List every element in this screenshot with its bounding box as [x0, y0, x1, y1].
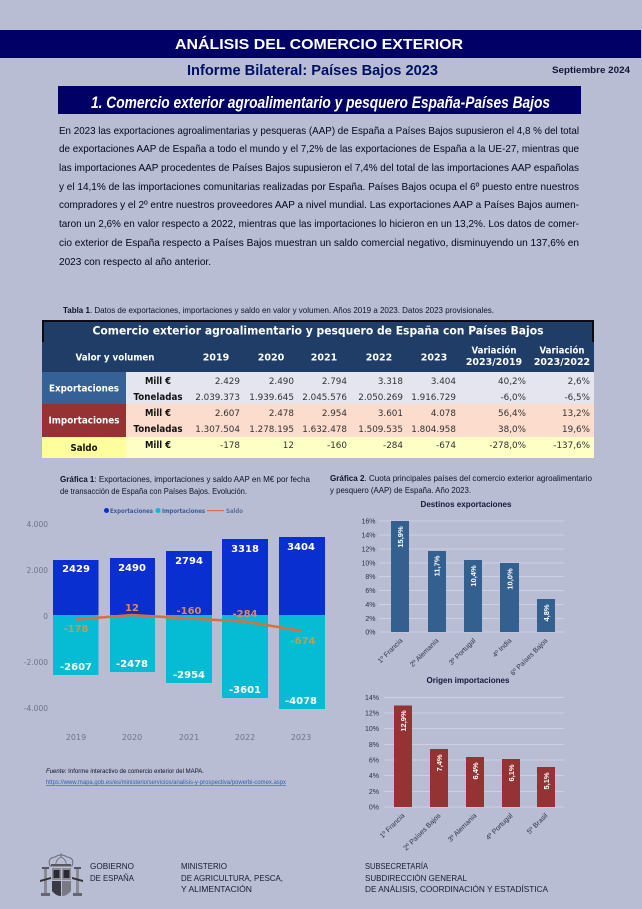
- footer: Ministerio: Y ALIMENTACIÓN: [181, 884, 252, 894]
- y axis: 10%: [365, 726, 379, 733]
- footer: Subsecretaría: SUBSECRETARÍA: [365, 861, 428, 871]
- table: comercio exterior: 40,2%: [498, 377, 526, 387]
- table: comercio exterior: -284: [383, 441, 403, 451]
- bar labels: 6,4%: [471, 762, 480, 780]
- table: comercio exterior: 2.794: [322, 377, 347, 387]
- chart 1 axis labels: 4.000: [27, 520, 48, 529]
- bar labels: 15,9%: [396, 526, 405, 548]
- table: comercio exterior: Saldo: [70, 443, 98, 454]
- chart title: Origen importaciones: [426, 675, 510, 685]
- table: comercio exterior: Toneladas: [134, 424, 183, 435]
- table: comercio exterior: 12: [283, 441, 294, 451]
- gridlines: [379, 521, 564, 632]
- chart 1 axis labels: 0: [43, 612, 48, 621]
- table: comercio exterior: 2.050.269: [358, 393, 403, 403]
- bar labels: 11,7%: [432, 555, 442, 576]
- chart 1: exports, imports and balance: 2022: [235, 733, 255, 742]
- table: comercio exterior: -6,0%: [500, 393, 526, 403]
- table: comercio exterior: 2023: [421, 352, 447, 364]
- bar value labels: -3601: [229, 685, 261, 696]
- table: comercio exterior: 2.045.576: [302, 393, 347, 403]
- table: comercio exterior: 1.307.504: [195, 425, 240, 435]
- chart 1 legend: Saldo: [226, 507, 243, 515]
- bar value labels: -2607: [60, 662, 92, 673]
- intro paragraph: cio exterior de España respecto a Países Bajos muestran un saldo comercial negativo, disminuyendo un 137,6% en: [59, 237, 579, 249]
- table: comercio exterior: -6,5%: [564, 393, 590, 403]
- bar value labels: 2490: [118, 563, 146, 574]
- table caption: Tabla 1. Datos de exportaciones, importaciones y saldo en valor y volumen. Años 2019 a 2023. Datos 2023 provisionales.: [63, 306, 494, 315]
- table: comercio exterior: 2021: [311, 352, 337, 364]
- intro paragraph: [59, 125, 579, 268]
- country labels: 3º Alemania: [447, 812, 478, 844]
- date: Septiembre 2024: [552, 65, 631, 76]
- table: comercio exterior: 1.278.195: [249, 425, 294, 435]
- source note: https://www.mapa.gob.es/es/ministerio/servicios/analisis-y-prospectiva/powerbi-comex.aspx: [46, 780, 286, 786]
- balance value labels: -674: [290, 636, 316, 647]
- table: comercio exterior: Toneladas: [134, 392, 183, 403]
- balance value labels: -160: [176, 606, 202, 617]
- source note: [46, 769, 286, 786]
- y axis: 16%: [361, 518, 376, 526]
- table: comercio exterior: 3.601: [378, 409, 403, 419]
- table: comercio exterior: 2022: [366, 352, 392, 364]
- table: comercio exterior: Mill €: [145, 408, 171, 419]
- table: comercio exterior: -160: [327, 441, 347, 451]
- balance value labels: [63, 603, 316, 647]
- country labels: [379, 812, 550, 852]
- bar labels: 12,9%: [399, 710, 408, 732]
- table: comercio exterior: 2.429: [215, 377, 240, 387]
- gridlines: [384, 698, 564, 807]
- table: comercio exterior: Comercio exterior agroalimentario y pesquero de España con Países Bajos: [92, 324, 544, 338]
- chart 1 axis labels: 2.000: [27, 566, 48, 575]
- bar value labels: 3318: [231, 544, 259, 555]
- chart 1: exports, imports and balance: 2020: [122, 733, 142, 742]
- table: comercio exterior: 2020: [258, 352, 285, 364]
- bar labels: [399, 710, 551, 790]
- country labels: 4º Portugal: [485, 812, 515, 842]
- y axis: 6%: [369, 758, 379, 764]
- y axis: 10%: [361, 560, 376, 568]
- footer: Subsecretaría: DE ANÁLISIS, COORDINACIÓN Y ESTADÍSTICA: [365, 884, 548, 894]
- export bars: [53, 537, 325, 615]
- footer: Gobierno de España: GOBIERNO: [90, 861, 134, 871]
- chart 2 caption: y pesquero (AAP) de España. Año 2023.: [330, 485, 471, 495]
- bar value labels: -4078: [285, 696, 317, 707]
- y axis: 4%: [365, 602, 376, 609]
- table: comercio exterior: 13,2%: [562, 409, 590, 419]
- table: comercio exterior: Mill €: [145, 376, 171, 387]
- table: comercio exterior: 3.404: [431, 377, 456, 387]
- country labels: 3º Portugal: [448, 637, 478, 667]
- table: comercio exterior: [42, 320, 594, 458]
- bar labels: [396, 526, 551, 622]
- bar value labels: 3404: [287, 542, 315, 553]
- country labels: 5º Brasil: [526, 812, 550, 836]
- bar value labels: -2478: [116, 659, 148, 670]
- intro paragraph: de exportaciones AAP de España a todo el mundo y el 7,2% de las exportaciones de España a la UE-27, mientras que: [59, 143, 579, 155]
- table: comercio exterior: Variación: [540, 346, 585, 356]
- y axis: [361, 518, 376, 636]
- table: comercio exterior: 1.804.958: [411, 425, 456, 435]
- section heading banner: 1. Comercio exterior agroalimentario y pesquero España-Países Bajos: [91, 94, 550, 112]
- bar labels: 7,4%: [435, 754, 444, 772]
- y axis: 8%: [365, 574, 376, 581]
- country labels: [377, 637, 550, 677]
- subtitle: Informe Bilateral: Países Bajos 2023: [187, 62, 438, 79]
- footer: Subsecretaría: SUBDIRECCIÓN GENERAL: [365, 873, 467, 883]
- intro paragraph: 2023 con respecto al año anterior.: [59, 256, 211, 268]
- section heading banner: [58, 86, 581, 114]
- bars: [391, 521, 555, 632]
- chart 2 caption: Gráfica 2. Cuota principales países del comercio exterior agroalimentario: [330, 473, 605, 483]
- chart 1: exports, imports and balance: 2021: [179, 733, 199, 742]
- chart 1 legend: Importaciones: [162, 507, 205, 515]
- bar value labels: [60, 542, 317, 707]
- y axis: 0%: [365, 630, 376, 636]
- table: comercio exterior: 1.509.535: [358, 425, 403, 435]
- footer: Gobierno de España: DE ESPAÑA: [90, 873, 134, 883]
- y axis: 12%: [365, 710, 379, 718]
- intro paragraph: y el 14,1% de las importaciones comunitarias realizadas por España. Países Bajos ocupa el 6º puesto entre nuestros: [59, 181, 579, 193]
- table: comercio exterior: 56,4%: [498, 409, 526, 419]
- chart 1 axis labels: [24, 520, 48, 713]
- table: comercio exterior: 1.939.645: [249, 393, 294, 403]
- table: comercio exterior: 2.478: [269, 409, 294, 419]
- y axis: 0%: [369, 804, 379, 812]
- y axis: 2%: [369, 789, 379, 796]
- bar value labels: -2954: [173, 670, 205, 681]
- table: comercio exterior: 2.039.373: [195, 393, 240, 403]
- country labels: 1º Francia: [379, 812, 406, 840]
- source note: Fuente: Informe interactivo de comercio exterior del MAPA.: [46, 769, 204, 775]
- chart title: Destinos exportaciones: [420, 499, 512, 509]
- y axis: 8%: [369, 742, 379, 749]
- import bars: [53, 615, 325, 709]
- country labels: 6º Países Bajos: [510, 637, 550, 677]
- y axis: [365, 695, 379, 812]
- table: comercio exterior: 2,6%: [568, 377, 590, 387]
- bar labels: 6,1%: [507, 764, 516, 782]
- footer: Ministerio: MINISTERIO: [181, 861, 227, 871]
- table: comercio exterior: 19,6%: [562, 425, 590, 435]
- country labels: 2º Países Bajos: [403, 812, 443, 852]
- table: comercio exterior: Mill €: [145, 440, 171, 451]
- chart 1 axis labels: -2.000: [24, 658, 48, 667]
- footer: Ministerio: DE AGRICULTURA, PESCA,: [181, 873, 283, 883]
- chart 2: export destinations: [361, 499, 564, 677]
- bar labels: 10,4%: [469, 565, 478, 587]
- table: comercio exterior: 2.607: [215, 409, 240, 419]
- y axis: 4%: [369, 773, 379, 780]
- intro paragraph: taron un 2,6% en valor respecto a 2022, mientras que las importaciones lo hicieron en un 13,2%. Los datos de comer-: [59, 218, 579, 230]
- y axis: 14%: [361, 532, 376, 540]
- header band: main title: [0, 30, 641, 58]
- table: comercio exterior: Exportaciones: [49, 384, 119, 394]
- bar value labels: 2794: [175, 556, 203, 567]
- table: comercio exterior: Importaciones: [48, 416, 120, 426]
- bar value labels: 2429: [62, 564, 90, 575]
- chart 1 legend: Exportaciones: [110, 507, 153, 515]
- y axis: 6%: [365, 588, 376, 595]
- table: comercio exterior: 2023/2019: [466, 357, 522, 368]
- table: comercio exterior: 2019: [203, 352, 229, 364]
- chart 3: import origins: [365, 675, 564, 852]
- chart 1: exports, imports and balance: 2019: [66, 733, 86, 742]
- chart 1: exports, imports and balance: 2023: [291, 733, 311, 742]
- balance line: [76, 615, 302, 631]
- table: comercio exterior: 4.078: [431, 409, 456, 419]
- y axis: 12%: [361, 546, 376, 554]
- balance value labels: 12: [125, 603, 139, 614]
- bar labels: 4,8%: [542, 604, 551, 622]
- intro paragraph: las importaciones AAP procedentes de Países Bajos supusieron el 7,4% del total de las importaciones AAP españolas: [59, 162, 579, 174]
- table: comercio exterior: -178: [220, 441, 240, 451]
- chart 1 caption: de transacción de España con Países Bajos. Evolución.: [60, 486, 247, 496]
- country labels: 1º Francia: [377, 637, 404, 665]
- y axis: 14%: [365, 695, 379, 702]
- bar labels: 5,1%: [542, 772, 551, 790]
- table: comercio exterior: -137,6%: [553, 441, 590, 451]
- country labels: 2º Alemania: [409, 637, 440, 669]
- y axis: 2%: [365, 616, 376, 623]
- table: comercio exterior: 1.632.478: [302, 425, 347, 435]
- chart 1 axis labels: -4.000: [24, 704, 48, 713]
- table: comercio exterior: Variación: [472, 346, 517, 356]
- table: comercio exterior: 3.318: [378, 377, 403, 387]
- balance value labels: -178: [63, 624, 89, 635]
- table: comercio exterior: 2.490: [269, 377, 294, 387]
- chart 1: exports, imports and balance: [24, 507, 325, 742]
- balance value labels: -284: [232, 609, 258, 620]
- country labels: 4º India: [492, 637, 513, 659]
- intro paragraph: En 2023 las exportaciones agroalimentarias y pesqueras (AAP) de España a Países Bajos supusieron el 4,8 % del total: [59, 125, 579, 137]
- intro paragraph: compradores y el 2º entre nuestros proveedores AAP a nivel mundial. Las exportaciones AAP a Países Bajos aumen-: [59, 199, 579, 211]
- table: comercio exterior: 2.954: [322, 409, 347, 419]
- chart 1 legend: [104, 507, 243, 515]
- chart 1 caption: Gráfica 1: Exportaciones, importaciones y saldo AAP en M€ por fecha: [60, 474, 322, 484]
- table: comercio exterior: 2023/2022: [534, 357, 590, 368]
- icon: coat of arms of Spain: [40, 853, 83, 896]
- table: comercio exterior: -674: [436, 441, 456, 451]
- bars: [394, 706, 555, 807]
- bar labels: 10,0%: [506, 568, 514, 590]
- header band: main title: ANÁLISIS DEL COMERCIO EXTERIOR: [175, 36, 463, 53]
- table: comercio exterior: -278,0%: [489, 441, 526, 451]
- table: comercio exterior: 38,0%: [498, 425, 526, 435]
- table: comercio exterior: 1.916.729: [411, 393, 456, 403]
- table: comercio exterior: Valor y volumen: [76, 352, 155, 364]
